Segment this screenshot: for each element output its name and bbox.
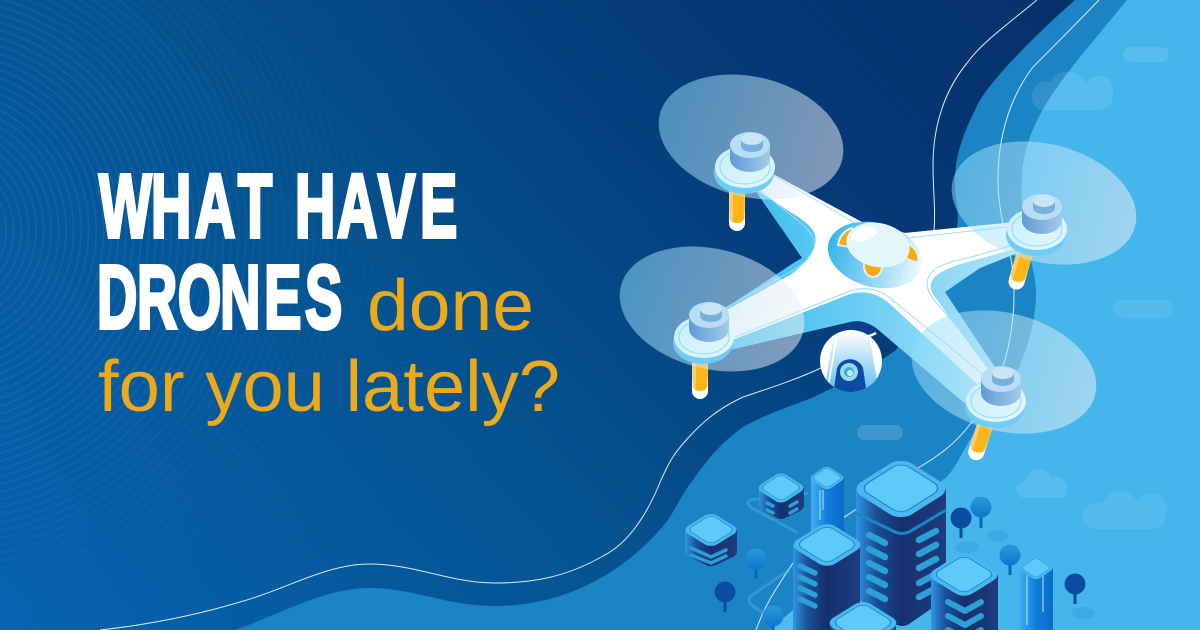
pill: centre bbox=[857, 425, 903, 440]
cloud: large lower bbox=[1083, 491, 1167, 529]
rotor: bottom left bbox=[606, 228, 818, 390]
landing leg: top right bbox=[1007, 243, 1035, 291]
roads bbox=[748, 493, 1068, 628]
rotor: top right bbox=[939, 123, 1149, 283]
city bbox=[682, 457, 1095, 630]
building: thin right tower bbox=[1017, 555, 1055, 630]
light-blue wave shape bbox=[770, 0, 1200, 630]
building: small left bbox=[682, 512, 740, 566]
motor: top right bbox=[1006, 194, 1067, 256]
drone bbox=[606, 56, 1149, 462]
camera bbox=[820, 320, 882, 395]
title line: what have: WHAT HAVE bbox=[99, 155, 457, 256]
title line: drones: DRONES bbox=[97, 246, 342, 347]
ground plate bbox=[770, 590, 900, 630]
line: outer arc bbox=[933, 0, 1037, 230]
building: tall central tower bbox=[850, 457, 952, 626]
tree shadows bbox=[728, 530, 1095, 627]
landing leg: bottom right bbox=[966, 414, 996, 462]
title word: done: done bbox=[367, 266, 534, 346]
airframe underside bbox=[715, 180, 1030, 412]
airframe top bbox=[714, 166, 1025, 384]
motor: top left bbox=[714, 132, 775, 194]
central hub bbox=[820, 212, 930, 298]
trees bbox=[714, 496, 1086, 630]
rotor: bottom right bbox=[899, 292, 1109, 452]
motor: bottom left bbox=[673, 302, 734, 364]
building: right tower bbox=[926, 551, 1002, 630]
title line: for you lately: for you lately? bbox=[98, 347, 560, 427]
clouds and pills bbox=[857, 47, 1173, 529]
pill: top right bbox=[1123, 47, 1169, 62]
title bbox=[97, 155, 560, 427]
line: inner arc to city bbox=[756, 0, 1099, 630]
landing leg: bottom left bbox=[692, 353, 708, 399]
landing leg: top left bbox=[729, 185, 745, 231]
building: small rear bbox=[756, 471, 806, 519]
rotor: top left bbox=[645, 56, 857, 218]
line: camera trail to bottom left bbox=[100, 368, 821, 630]
cloud: small lower bbox=[1016, 469, 1067, 498]
building: left tower bbox=[789, 521, 865, 630]
pill: right bbox=[1113, 300, 1173, 318]
building: front tower bbox=[825, 599, 901, 630]
building: thin rear tower bbox=[808, 465, 846, 544]
cloud: upper bbox=[1032, 72, 1113, 110]
motor: bottom right bbox=[965, 366, 1026, 428]
